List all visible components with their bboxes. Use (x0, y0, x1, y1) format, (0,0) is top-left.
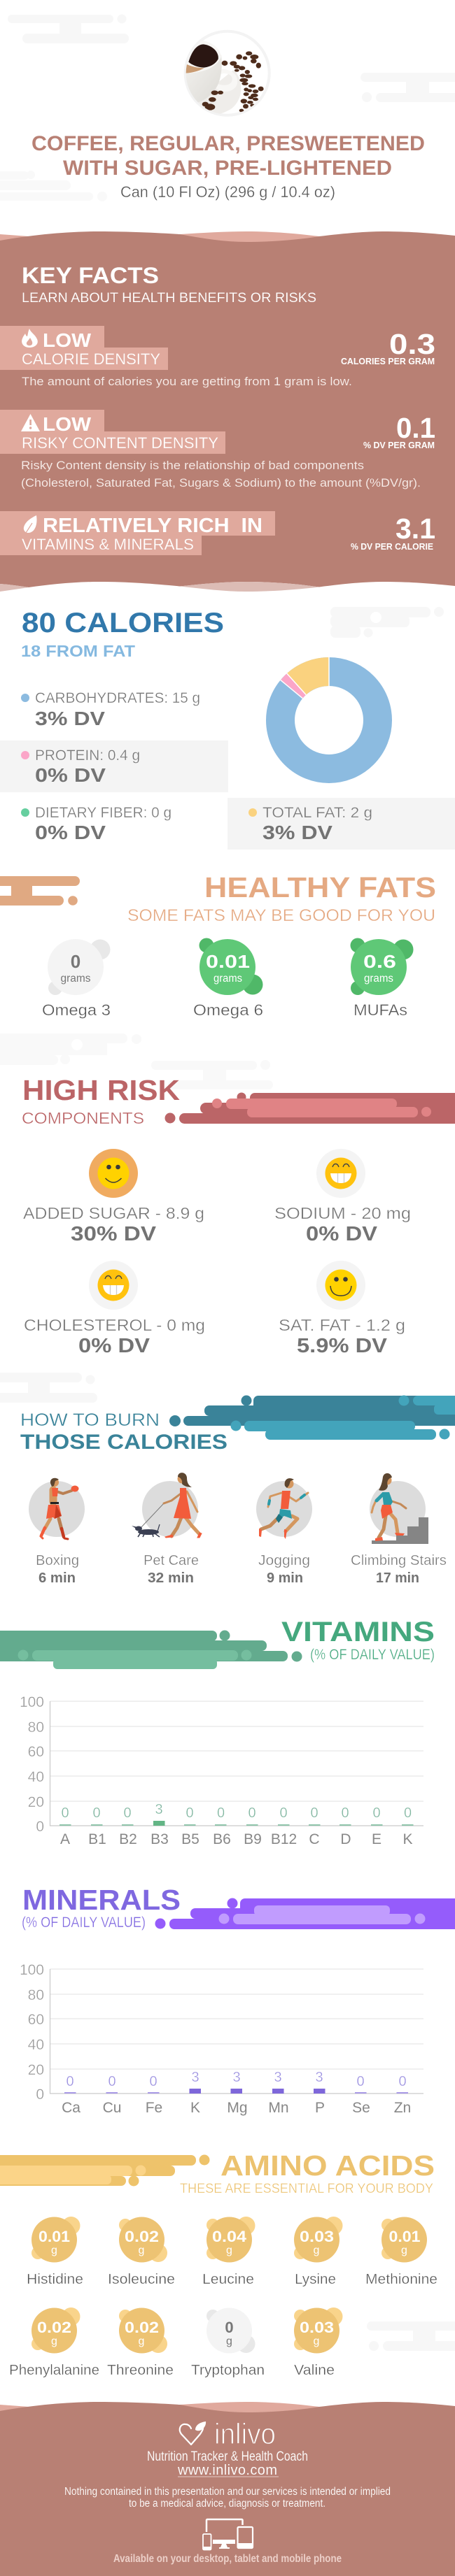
rating: low: LOW (43, 329, 92, 351)
activity: boxing (29, 1478, 85, 1586)
background clouds: high risk (0, 1033, 273, 1089)
label: calorie density: CALORIE DENSITY (22, 350, 160, 368)
value: 3.1 % dv per calorie: % DV PER CALORIE (351, 541, 433, 552)
activity: jogging: 9 min (267, 1570, 303, 1586)
item: saturated fat: 5.9% DV (297, 1335, 388, 1357)
stat: lysine: g (314, 2245, 319, 2256)
legend: total fat: 3% DV (262, 822, 332, 843)
legend: protein: PROTEIN: 0.4 g (35, 747, 140, 764)
legend: dietary fiber: DIETARY FIBER: 0 g (35, 805, 172, 821)
bar chart: vitamins: 0 (248, 1805, 256, 1821)
logo: inlivo (180, 2417, 276, 2450)
panel: amino acids (9, 2149, 438, 2378)
bar chart: minerals: 3 (274, 2070, 282, 2085)
stat: methionine: Methionine (365, 2272, 438, 2287)
bar chart: minerals: P (315, 2100, 325, 2116)
legend: total fat: TOTAL FAT: 2 g (262, 805, 372, 821)
value: 0.3 calories per gram (341, 328, 435, 366)
icon: flame (22, 329, 38, 348)
bar chart: minerals: 60 (28, 2012, 44, 2028)
bar chart: vitamins: 0 (186, 1805, 194, 1821)
activity: jogging (256, 1478, 312, 1586)
stat: isoleucine (108, 2217, 175, 2287)
bar chart: minerals: 0 (66, 2074, 74, 2089)
subheading: percent of daily value: (% OF DAILY VALUE) (22, 1915, 146, 1931)
bar chart: vitamins: D (340, 1831, 351, 1847)
bar chart: vitamins: 0 (36, 1819, 44, 1835)
stat: tryptophan: g (226, 2335, 232, 2347)
stat: isoleucine: Isoleucine (108, 2272, 175, 2287)
bar chart: minerals: 0 (149, 2074, 158, 2089)
legend: carbohydrates: CARBOHYDRATES: 15 g (35, 690, 200, 706)
item: cholesterol: 0% DV (78, 1335, 150, 1357)
activity: boxing: Boxing (36, 1553, 79, 1568)
decorative band: vitamins (0, 1631, 302, 1669)
activity: jogging: Jogging (258, 1553, 310, 1568)
stat: mufas: MUFAs (354, 1001, 407, 1019)
background cloud: calories (330, 607, 444, 638)
bar chart: minerals (20, 1962, 424, 2116)
bar chart: vitamins: C (309, 1831, 320, 1847)
bar chart: minerals: Zn (394, 2100, 411, 2116)
stat: methionine (365, 2217, 438, 2287)
stat: histidine: 0.01 (38, 2228, 70, 2245)
fact: calorie density (0, 326, 435, 388)
bar chart: vitamins: 20 (28, 1794, 44, 1810)
panel: minerals (20, 1884, 424, 2116)
stat: valine: 0.03 (300, 2319, 334, 2336)
subheading: learn about: LEARN ABOUT HEALTH BENEFITS OR RISKS (22, 291, 316, 306)
activity: climbing stairs: 17 min (376, 1570, 419, 1586)
stat: tryptophan: 0 (225, 2319, 234, 2336)
value: 3.1 % dv per calorie: 3.1 (396, 513, 435, 545)
stat: omega 6 (193, 938, 263, 1019)
stat: mufas: grams (364, 973, 393, 985)
legend: dietary fiber (21, 805, 172, 843)
bar chart: vitamins: B5 (181, 1831, 200, 1847)
description: (Cholesterol, Saturated Fat, Sugars & Sodium) to the amount (%DV/gr). (21, 477, 421, 489)
disclaimer (64, 2486, 391, 2510)
panel: vitamins (20, 1617, 435, 1847)
background cloud: amino acids (367, 2321, 455, 2351)
stat: valine (294, 2307, 343, 2378)
bar chart: minerals: 40 (28, 2037, 44, 2053)
bar chart: vitamins: 0 (372, 1805, 381, 1821)
bar chart: vitamins: 0 (123, 1805, 132, 1821)
bar chart: minerals: 0 (398, 2074, 407, 2089)
bar chart: vitamins: 3 (155, 1802, 163, 1817)
stat: histidine: g (51, 2245, 57, 2256)
decorative band: burn calories (169, 1396, 455, 1440)
item: added sugar: ADDED SUGAR - 8.9 g (23, 1204, 204, 1222)
bar chart: minerals: 100 (20, 1962, 44, 1978)
background clouds: header (0, 14, 455, 201)
legend: carbohydrates (21, 690, 200, 729)
bar chart: minerals: 0 (36, 2087, 44, 2103)
stat: lysine: 0.03 (300, 2228, 334, 2245)
bar chart: minerals: 20 (28, 2062, 44, 2078)
item: saturated fat (279, 1261, 405, 1357)
stat: isoleucine: 0.02 (125, 2228, 159, 2245)
stat: omega 3: Omega 3 (42, 1001, 111, 1019)
stat: mufas (350, 938, 413, 1019)
item: sodium (274, 1149, 411, 1245)
stat: threonine: Threonine (107, 2363, 174, 2378)
bar chart: minerals: Cu (103, 2100, 121, 2116)
value: 0.3 calories per gram: CALORIES PER GRAM (341, 356, 435, 366)
stat: omega 3: grams (60, 973, 91, 985)
item: cholesterol (24, 1261, 205, 1357)
bar chart: minerals: Se (352, 2100, 370, 2116)
title: WITH SUGAR, PRE-LIGHTENED (63, 157, 392, 180)
bar chart: vitamins: 0 (341, 1805, 349, 1821)
panel: how to burn those calories (20, 1410, 447, 1586)
fact: risky content density (0, 410, 435, 489)
bar chart: vitamins: 0 (404, 1805, 412, 1821)
activity: pet care (132, 1473, 202, 1586)
item: cholesterol: CHOLESTEROL - 0 mg (24, 1316, 205, 1334)
bar chart: vitamins: B9 (244, 1831, 262, 1847)
stat: omega 6: grams (214, 973, 242, 985)
stat: phenylalanine (9, 2307, 99, 2378)
heading: healthy fats: HEALTHY FATS (204, 871, 436, 903)
heading: minerals: MINERALS (22, 1884, 181, 1916)
panel: key facts (0, 231, 455, 592)
bar chart: vitamins: 0 (61, 1805, 69, 1821)
donut chart (280, 657, 378, 769)
stat: methionine: g (401, 2245, 407, 2256)
heading: key facts: KEY FACTS (22, 263, 159, 288)
stat: omega 3 (42, 939, 111, 1019)
stat: omega 3: 0 (71, 951, 80, 972)
bar chart: vitamins: 0 (92, 1805, 101, 1821)
stat: threonine: g (139, 2335, 144, 2347)
bar chart: minerals: 0 (356, 2074, 365, 2089)
stat: leucine: 0.04 (212, 2228, 247, 2245)
item: sodium: SODIUM - 20 mg (274, 1204, 411, 1222)
panel: high risk components (22, 1074, 411, 1357)
value: 0.3 calories per gram: 0.3 (389, 328, 435, 360)
tagline: Nutrition Tracker & Health Coach (147, 2449, 308, 2464)
website link: www.inlivo.com (177, 2463, 277, 2478)
item: added sugar: 30% DV (71, 1223, 157, 1245)
food photo: coffee cup with beans (183, 31, 270, 115)
panel: calories (0, 608, 455, 850)
stat: tryptophan: Tryptophan (191, 2363, 265, 2378)
bar chart: vitamins: B6 (213, 1831, 231, 1847)
activity: boxing: 6 min (38, 1570, 76, 1586)
bar chart: vitamins: E (372, 1831, 382, 1847)
bar chart: vitamins: B3 (150, 1831, 169, 1847)
bar chart: vitamins: B2 (119, 1831, 137, 1847)
heading: those calories: THOSE CALORIES (20, 1431, 227, 1454)
stat: histidine: Histidine (27, 2272, 83, 2287)
rating: relatively rich in: RELATIVELY RICH IN (43, 515, 262, 537)
serving size: Can (10 Fl Oz) (296 g / 10.4 oz) (120, 183, 335, 201)
stat: leucine: g (226, 2245, 232, 2256)
panel: footer (0, 2402, 455, 2576)
bar chart: vitamins: 60 (28, 1744, 44, 1760)
bar chart: minerals: Fe (146, 2100, 162, 2116)
bar chart: vitamins (20, 1694, 424, 1847)
decorative band: amino acids (0, 2155, 210, 2186)
item: saturated fat: SAT. FAT - 1.2 g (279, 1316, 405, 1334)
activity: climbing stairs (351, 1473, 447, 1586)
description: The amount of calories you are getting from 1 gram is low. (22, 375, 352, 388)
stat: leucine: Leucine (202, 2272, 254, 2287)
decorative band: minerals (155, 1898, 455, 1929)
decorative band: high risk (165, 1092, 455, 1124)
bar chart: minerals: 80 (28, 1987, 44, 2003)
activity: pet care: Pet Care (144, 1553, 199, 1568)
heading: vitamins: VITAMINS (281, 1617, 435, 1647)
stat: omega 6: Omega 6 (193, 1001, 263, 1019)
panel: healthy fats (42, 871, 436, 1019)
stat: phenylalanine: 0.02 (37, 2319, 71, 2336)
stat: methionine: 0.01 (389, 2228, 420, 2245)
legend: protein (0, 740, 228, 792)
bar chart: vitamins: 0 (279, 1805, 288, 1821)
bar chart: vitamins: B12 (271, 1831, 297, 1847)
heading: how to burn: HOW TO BURN (20, 1410, 160, 1430)
availability note: Available on your desktop, tablet and mobile phone (113, 2553, 342, 2565)
title: COFFEE, REGULAR, PRESWEETENED (31, 132, 425, 155)
legend: total fat (227, 798, 455, 850)
bar chart: minerals: K (190, 2100, 200, 2116)
item: added sugar (23, 1149, 204, 1245)
bar chart: minerals: Mn (268, 2100, 289, 2116)
stat: threonine: 0.02 (125, 2319, 159, 2336)
stat: phenylalanine: Phenylalanine (9, 2363, 99, 2378)
bar chart: vitamins: K (402, 1831, 413, 1847)
background cloud: burn calories (0, 1373, 97, 1403)
title (31, 132, 425, 180)
label: risky content density: RISKY CONTENT DENSITY (22, 434, 218, 452)
logo: inlivo: inlivo (214, 2417, 276, 2450)
bar chart: minerals: 3 (191, 2070, 200, 2085)
icon: warning triangle (21, 414, 40, 431)
stat: phenylalanine: g (51, 2335, 57, 2347)
fact: vitamins and minerals (0, 511, 435, 555)
value: 3.1 % dv per calorie (351, 513, 435, 552)
bar chart: minerals: 0 (108, 2074, 116, 2089)
legend: dietary fiber: 0% DV (35, 822, 106, 843)
stat: isoleucine: g (139, 2245, 144, 2256)
icon: desktop, tablet and phone (203, 2519, 253, 2550)
stat: valine: g (314, 2335, 319, 2347)
subheading: some fats: SOME FATS MAY BE GOOD FOR YOU (127, 906, 435, 925)
stat: leucine (202, 2217, 255, 2287)
bar chart: minerals: 3 (315, 2070, 323, 2085)
decorative band: healthy fats (0, 876, 80, 906)
heading: high risk: HIGH RISK (22, 1074, 180, 1106)
description (21, 459, 421, 489)
stat: lysine (294, 2217, 343, 2287)
stat: threonine (107, 2307, 174, 2378)
disclaimer: to be a medical advice, diagnosis or treatment. (129, 2498, 326, 2510)
rating: low: LOW (43, 413, 92, 435)
bar chart: vitamins: 100 (20, 1694, 44, 1710)
subheading: essential: THESE ARE ESSENTIAL FOR YOUR BODY (180, 2182, 433, 2196)
subheading: 18 from fat: 18 FROM FAT (21, 642, 135, 660)
bar chart: minerals: 3 (232, 2070, 241, 2085)
item: sodium: 0% DV (306, 1223, 378, 1245)
stat: tryptophan (191, 2307, 265, 2378)
stat: histidine (27, 2217, 83, 2287)
subheading: percent of daily value: (% OF DAILY VALUE) (310, 1647, 435, 1663)
activity: climbing stairs: Climbing Stairs (351, 1553, 447, 1568)
bar chart: vitamins: 0 (310, 1805, 318, 1821)
stat: lysine: Lysine (295, 2272, 336, 2287)
bar chart: minerals: Mg (227, 2100, 248, 2116)
value: 0.1 % dv per gram: 0.1 (396, 412, 435, 444)
description: Risky Content density is the relationship of bad components (21, 459, 364, 472)
bar chart: vitamins: B1 (88, 1831, 106, 1847)
disclaimer: Nothing contained in this presentation and our services is intended or implied (64, 2486, 391, 2498)
legend: protein: 0% DV (35, 764, 106, 786)
subheading: components: COMPONENTS (22, 1109, 144, 1127)
value: 0.1 % dv per gram (363, 412, 435, 450)
bar chart: minerals: Ca (62, 2100, 80, 2116)
bar chart: vitamins: A (60, 1831, 70, 1847)
stat: mufas: 0.6 (363, 951, 396, 972)
icon: leaf (24, 515, 36, 533)
heading: amino acids: AMINO ACIDS (220, 2149, 435, 2182)
bar chart: vitamins: 80 (28, 1719, 44, 1736)
stat: omega 6: 0.01 (206, 951, 250, 972)
stat: valine: Valine (294, 2363, 335, 2378)
label: vitamins and minerals: VITAMINS & MINERALS (22, 536, 194, 553)
bar chart: vitamins: 40 (28, 1769, 44, 1785)
bar chart: vitamins: 0 (217, 1805, 225, 1821)
heading: 80 calories: 80 CALORIES (22, 608, 224, 638)
activity: pet care: 32 min (148, 1570, 194, 1586)
value: 0.1 % dv per gram: % DV PER GRAM (363, 440, 435, 450)
legend: carbohydrates: 3% DV (35, 708, 105, 729)
